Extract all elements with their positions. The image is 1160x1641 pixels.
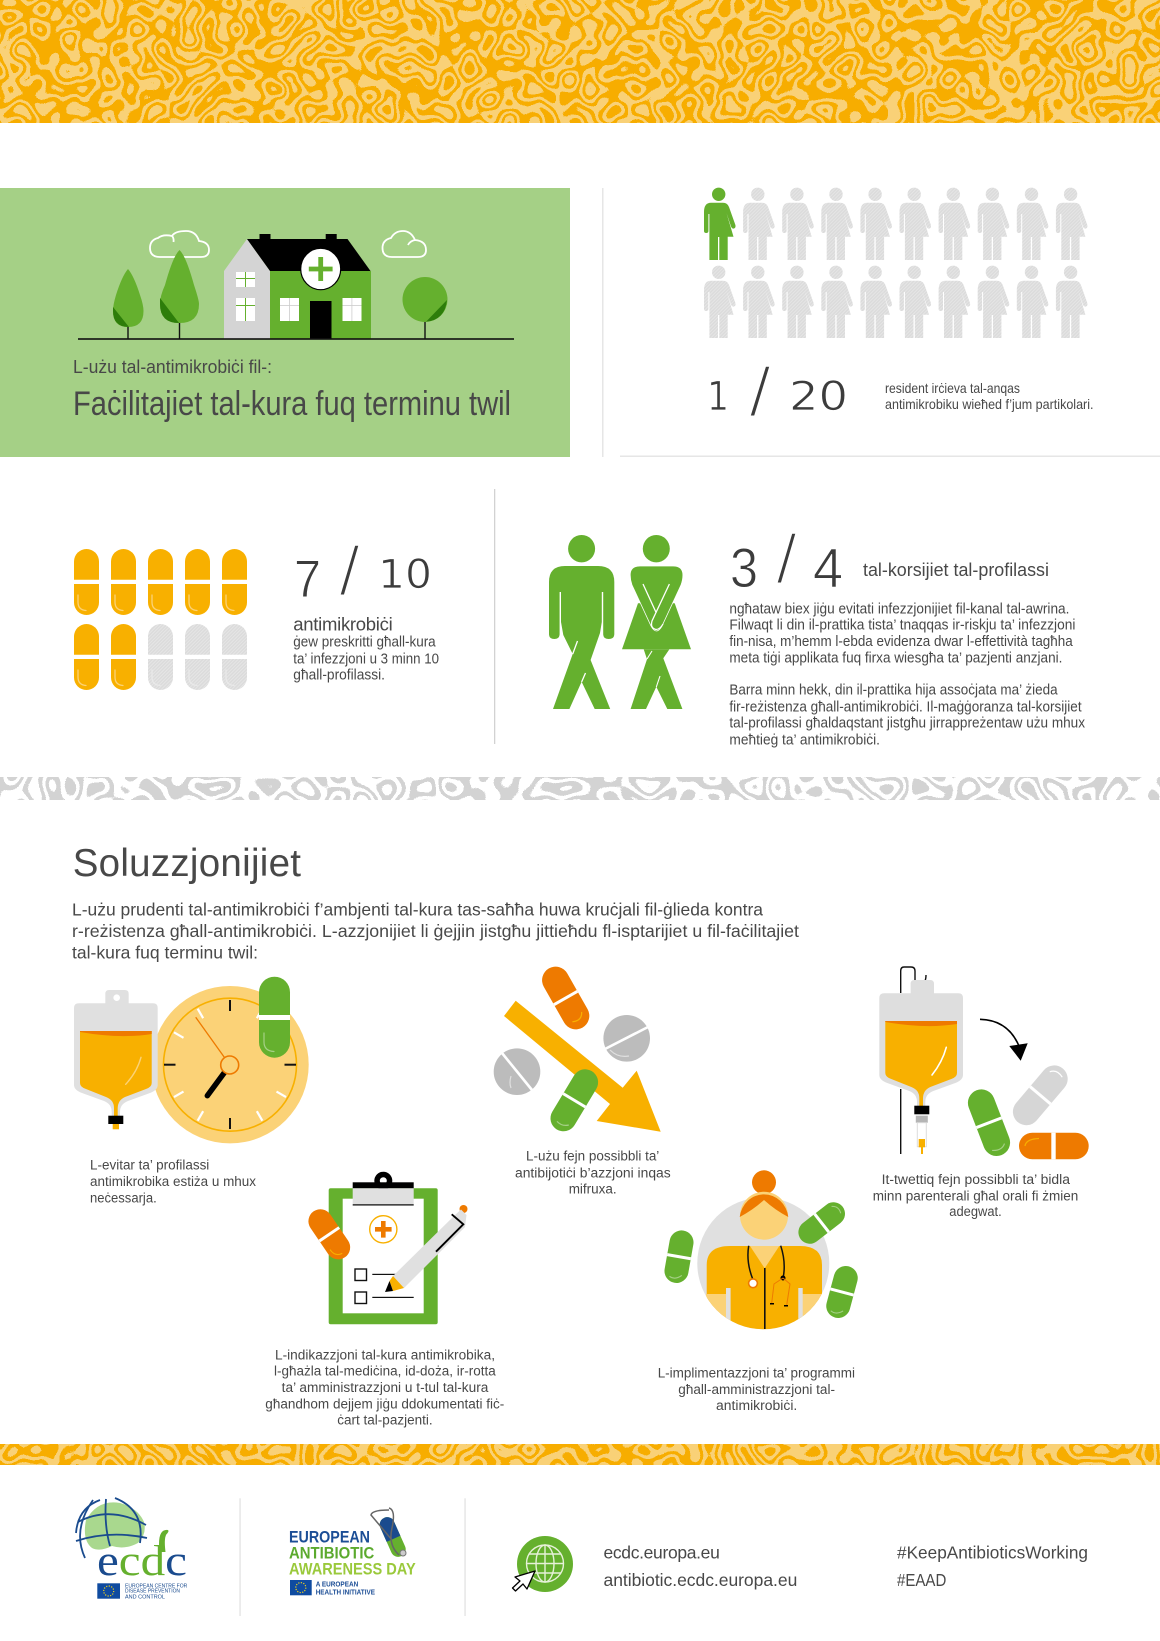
text block: prophylaxis explanation: meta tiġi applikata fuq firxa wiesgħa ta’ pazjenti anzjani. (729, 650, 1062, 666)
text block: prophylaxis explanation: fin-nisa, m’hemm l-ebda evidenza dwar l-effettività tagħha (729, 634, 1074, 650)
icon: EU flag (290, 1580, 312, 1595)
icon: grey capsule (1007, 1060, 1073, 1131)
icon: downward arrow (504, 1001, 661, 1132)
statistic: 3 / 4: / (776, 520, 798, 598)
icon: grey tablet left (494, 1048, 540, 1095)
icon: doctor (697, 1170, 829, 1340)
caption: ċart tal-pazjenti. (337, 1412, 433, 1427)
illustration: healthcare facility (78, 231, 514, 340)
statistic description: ġew preskritti għall-kura (293, 635, 437, 651)
statistic heading: tal-korsijiet tal-profilassi (863, 560, 1049, 580)
logo caption: DISEASE PREVENTION (125, 1589, 180, 1595)
statistic description (293, 614, 439, 683)
icon: green capsule (964, 1085, 1014, 1160)
statistic: 3 / 4: 3 (730, 536, 758, 599)
hero title: Faċilitajiet tal-kura fuq terminu twil (73, 385, 511, 423)
logo wordmark (289, 1528, 416, 1578)
icon: clipboard (329, 1172, 438, 1324)
statistic description: ta’ infezzjoni u 3 minn 10 (293, 651, 439, 667)
top patterned band (0, 0, 1160, 123)
statistic description: antimikrobiċi (293, 614, 393, 635)
caption: għall-amministrazzjoni tal- (678, 1382, 835, 1397)
caption (658, 1365, 855, 1413)
icon: web globe with cursor (512, 1536, 573, 1592)
caption: L-użu fejn possibbli ta’ (526, 1149, 659, 1164)
logo caption: AND CONTROL (125, 1594, 165, 1600)
statistic: 3 / 4: 4 (813, 536, 843, 599)
statistic description: antimikrobiku wieħed f’jum partikolari. (885, 396, 1094, 412)
arrow: switch to oral (980, 1019, 1028, 1061)
text block: solutions intro: r-reżistenza għall-antimikrobiċi. L-azzjonijiet li ġejjin jistgħu jittieħdu fl-isptarijiet u fil-faċilitajiet (72, 921, 799, 941)
statistic: 7 / 10: 7 (294, 550, 321, 609)
icon: tree 1 (113, 269, 144, 339)
hashtags: #KeepAntibioticsWorking (897, 1543, 1088, 1563)
hashtags (897, 1543, 1088, 1590)
statistic: 3 / 4 (730, 520, 843, 599)
statistic: 1 / 20: / (749, 353, 772, 431)
hashtags: #EAAD (897, 1570, 946, 1590)
statistic description (885, 380, 1094, 412)
icon: globe (76, 1498, 147, 1558)
text block: prophylaxis explanation: Barra minn hekk, din il-prattika hija assoċjata ma’ żieda (729, 683, 1058, 699)
panel: 7 in 10 antimicrobials (74, 532, 439, 690)
logo caption: EUROPEAN CENTRE FOR (125, 1583, 187, 1589)
caption (265, 1347, 504, 1427)
text block: prophylaxis explanation: tal-profilassi għaldaqstant jistgħu jirrappreżentaw użu mhux (729, 716, 1086, 732)
caption: adegwat. (949, 1204, 1002, 1219)
icon: cloud right (382, 231, 426, 257)
caption: It-twettiq fejn possibbli ta’ bidla (882, 1172, 1071, 1187)
icon: green capsule (259, 977, 290, 1058)
panel: hero setting (0, 188, 570, 457)
icon: woman (622, 535, 691, 709)
icon: clock (151, 986, 309, 1143)
links: antibiotic.ecdc.europa.eu (604, 1570, 797, 1590)
logo: ECDC (76, 1498, 187, 1600)
logo wordmark: AWARENESS DAY (289, 1560, 416, 1578)
solution 1: avoid prolonged prophylaxis (74, 977, 309, 1205)
icon: orange capsule (304, 1205, 355, 1264)
bottom patterned band (0, 1444, 1160, 1465)
caption (873, 1172, 1078, 1219)
caption: L-indikazzjoni tal-kura antimikrobika, (275, 1347, 495, 1362)
statistic description: resident irċieva tal-anqas (885, 380, 1020, 396)
caption: antimikrobika estiża u mhux (90, 1174, 256, 1189)
icon: stethoscope and capsule (371, 1508, 408, 1559)
logo wordmark: EUROPEAN (289, 1528, 370, 1546)
icon: man (549, 535, 614, 709)
caption: għandhom dejjem jiġu ddokumentati fiċ- (265, 1396, 504, 1411)
solution 5: parenteral to oral switch (873, 967, 1089, 1219)
text block: prophylaxis explanation (729, 601, 1086, 748)
links: ecdc.europa.eu (604, 1543, 720, 1563)
icon: EU flag (97, 1583, 120, 1599)
logo wordmark: ecdc (97, 1538, 187, 1585)
panel: 1 in 20 residents (704, 188, 1094, 431)
icon: IV bag (74, 990, 158, 1129)
caption (90, 1157, 256, 1205)
icon: tree 3 (402, 277, 448, 339)
heading: solutions: Soluzzjonijiet (73, 842, 301, 885)
statistic: 1 / 20 (707, 353, 848, 431)
icon: capsule top right (794, 1198, 850, 1248)
icon: tree 2 (160, 250, 199, 339)
caption: antimikrobiċi. (716, 1398, 797, 1413)
statistic: 7 / 10: 10 (378, 552, 432, 598)
logo tagline: HEALTH INITIATIVE (316, 1588, 375, 1597)
solution 4: stewardship programmes (658, 1170, 860, 1413)
icon: green capsule (546, 1064, 603, 1136)
logo tagline (316, 1580, 375, 1597)
icon: house (224, 234, 371, 339)
icon: IV stand (901, 967, 926, 1154)
statistic: 1 / 20: 20 (789, 374, 848, 420)
caption: L-evitar ta’ profilassi (90, 1157, 209, 1172)
text block: solutions intro: L-użu prudenti tal-antimikrobiċi f’ambjenti tal-kura tas-saħħa huwa kruċjali fil-ġlieda kontra (72, 900, 763, 920)
icon: orange capsule (1019, 1133, 1089, 1159)
footer (76, 1498, 1088, 1616)
logo: European Antibiotic Awareness Day (289, 1508, 416, 1597)
icon: capsule left (663, 1229, 695, 1285)
caption: antibijotiċi b’azzjoni inqas (515, 1165, 671, 1180)
solution 2: document indication (265, 1172, 504, 1427)
logo tagline: A EUROPEAN (316, 1580, 358, 1589)
hero subtitle: L-użu tal-antimikrobiċi fil-: (73, 356, 272, 377)
statistic: 7 / 10 (294, 532, 432, 610)
icon: grey tablet right (603, 1015, 650, 1062)
text block: prophylaxis explanation: meħtieġ ta’ antimikrobiċi. (729, 732, 880, 748)
icon: IV bag (879, 980, 963, 1154)
grey patterned band (0, 777, 1160, 800)
text block: prophylaxis explanation: fir-reżistenza għall-antimikrobiċi. Il-maġġoranza tal-korsijiet (729, 699, 1082, 715)
icon: pen (385, 1205, 468, 1292)
caption: l-għażla tal-mediċina, id-doża, ir-rotta (274, 1363, 496, 1378)
text block: prophylaxis explanation: Filwaqt li din il-prattika tista’ tnaqqas ir-riskju ta’ infezzjoni (729, 617, 1075, 633)
icon: orange capsule (537, 962, 594, 1034)
solution 3: narrow-spectrum antibiotics (494, 962, 671, 1196)
caption: neċessarja. (90, 1190, 157, 1205)
pictogram: 20 people, 1 highlighted (704, 188, 1087, 338)
links (604, 1543, 797, 1590)
pictogram: 10 capsules (74, 549, 247, 690)
caption: ta’ amministrazzjoni u t-tul tal-kura (282, 1380, 489, 1395)
icon: capsule bottom right (824, 1263, 860, 1321)
logo caption (125, 1583, 187, 1600)
icon: cloud left (150, 231, 209, 257)
caption: L-implimentazzjoni ta’ programmi (658, 1365, 855, 1380)
statistic: 7 / 10: / (339, 532, 361, 610)
text block: solutions intro (72, 900, 799, 962)
text block: prophylaxis explanation: ngħataw biex jiġu evitati infezzjonijiet fil-kanal tal-awrina. (729, 601, 1069, 617)
panel: 3 in 4 prophylaxis courses (549, 520, 1086, 748)
caption: minn parenterali għal orali fi żmien (873, 1189, 1078, 1204)
statistic: 1 / 20: 1 (707, 374, 729, 420)
caption (515, 1149, 671, 1196)
logo wordmark: ANTIBIOTIC (289, 1544, 374, 1562)
icon: leaf on d (160, 1530, 168, 1552)
text block: solutions intro: tal-kura fuq terminu twil: (72, 942, 258, 962)
caption: mifruxa. (569, 1181, 617, 1196)
statistic description: għall-profilassi. (293, 667, 385, 683)
